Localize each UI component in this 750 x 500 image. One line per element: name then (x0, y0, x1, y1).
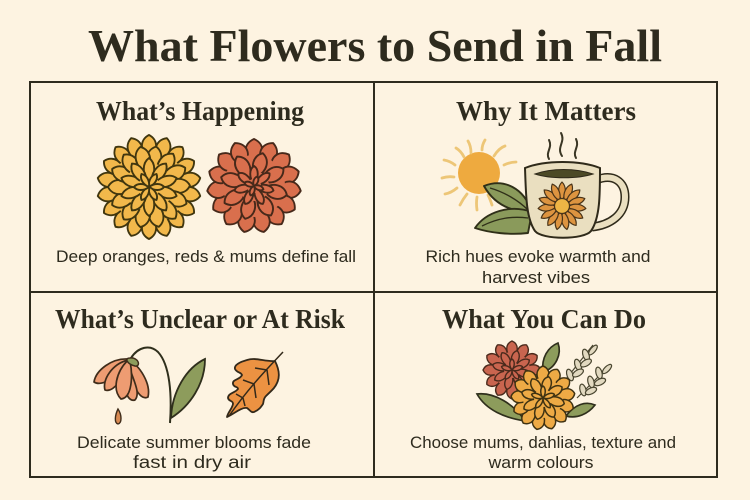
caption: what's happening: Deep oranges, reds & mums define fall (56, 248, 356, 266)
coffee (535, 170, 593, 178)
caption: what's unclear: fast in dry air (133, 452, 251, 472)
icon: autumn leaf (227, 352, 283, 417)
calyx (127, 358, 138, 366)
caption: what you can do: warm colours (487, 454, 594, 472)
panel: why it matters (426, 96, 650, 287)
falling drop (115, 409, 121, 424)
caption: what you can do (410, 434, 676, 472)
heading: what you can do: What You Can Do (442, 304, 646, 334)
icon: mug with sunflower (525, 133, 625, 238)
icon: leaves (475, 183, 532, 234)
leaf (171, 359, 205, 418)
heading: what's unclear: What’s Unclear or At Risk (55, 304, 345, 334)
title: What Flowers to Send in Fall (88, 21, 662, 71)
heading: what's happening: What’s Happening (96, 96, 304, 126)
panel grid frame (30, 82, 717, 477)
yellow mum (511, 366, 576, 431)
icon: sun (442, 140, 516, 210)
wheat sprigs (565, 344, 613, 398)
icon: red mum (206, 139, 302, 234)
icon: bouquet (477, 341, 613, 431)
caption: what you can do: Choose mums, dahlias, texture and (410, 434, 676, 452)
caption: what's unclear: Delicate summer blooms fade (77, 434, 311, 452)
caption: what's unclear (77, 434, 311, 472)
panel: what's happening (56, 96, 356, 266)
caption: why it matters: Rich hues evoke warmth and (426, 248, 650, 266)
sunflower (538, 182, 586, 230)
icon: wilted flower (94, 347, 205, 424)
caption: why it matters: harvest vibes (482, 269, 590, 287)
heading: why it matters: Why It Matters (456, 96, 636, 126)
steam (548, 133, 577, 159)
caption: why it matters (426, 248, 650, 287)
panel: what you can do (410, 304, 676, 472)
panel: what's unclear or at risk (55, 304, 345, 472)
stem (131, 347, 171, 423)
mug body (525, 162, 600, 238)
drooping petals (94, 359, 148, 400)
green leaves (477, 343, 595, 421)
red dahlia (483, 341, 541, 399)
icon: yellow mum (97, 135, 201, 239)
mug handle (592, 178, 625, 227)
